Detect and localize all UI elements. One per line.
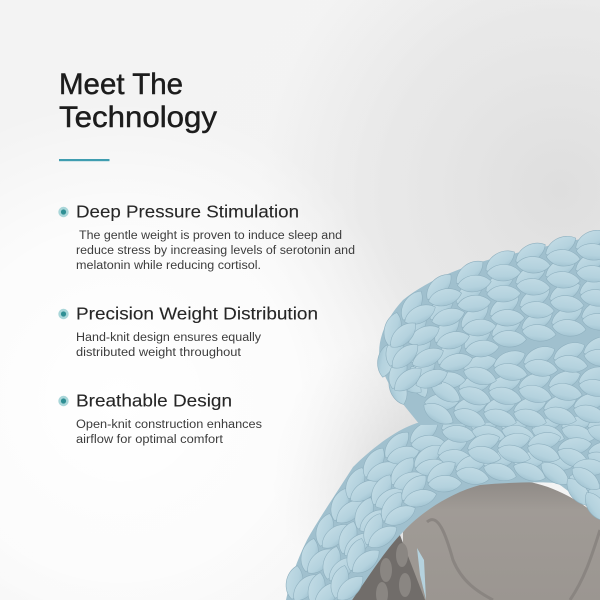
text block: breathable description: [76, 419, 262, 446]
title: Meet The: [59, 68, 183, 101]
feature: breathable design: [58, 390, 262, 446]
text block: breathable description: airflow for optimal comfort: [76, 434, 224, 446]
text block: deep pressure description: reduce stress by increasing levels of serotonin and: [76, 245, 355, 257]
photo: knit blanket shadowed inner fold: [352, 530, 426, 600]
text block: deep pressure description: melatonin while reducing cortisol.: [76, 260, 261, 272]
feature: precision weight distribution: [58, 304, 318, 359]
text block: precision description: distributed weight throughout: [76, 347, 242, 359]
icon: teal bullet: [58, 207, 69, 217]
heading: deep pressure stimulation: Deep Pressure Stimulation: [76, 202, 299, 222]
icon: teal bullet: [58, 396, 69, 406]
title: Technology: [59, 101, 217, 134]
feature: deep pressure stimulation: [58, 202, 355, 272]
photo: knit blanket lower drape: [275, 407, 600, 600]
icon: teal bullet: [58, 309, 69, 319]
title divider line: [59, 159, 110, 161]
text block: deep pressure description: The gentle weight is proven to induce sleep and: [79, 230, 342, 242]
text block: precision description: [76, 332, 261, 359]
text block: precision description: Hand-knit design ensures equally: [76, 332, 261, 344]
photo: concrete bust: [403, 480, 600, 600]
text block: deep pressure description: [76, 230, 355, 272]
photo: knit blanket upper fold: [372, 224, 600, 432]
heading: precision weight distribution: Precision Weight Distribution: [76, 304, 318, 324]
title: [59, 68, 217, 134]
heading: breathable design: Breathable Design: [76, 390, 232, 410]
text block: breathable description: Open-knit construction enhances: [76, 419, 262, 431]
